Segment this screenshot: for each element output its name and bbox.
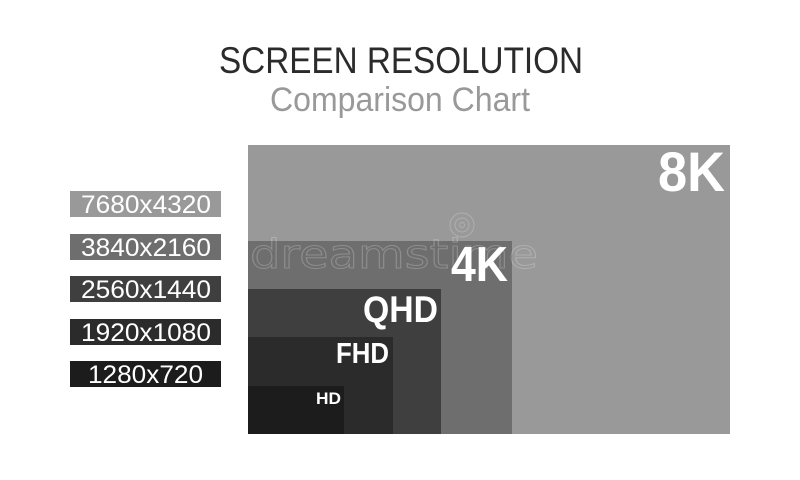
watermark: dreamstime	[250, 232, 538, 278]
title: SCREEN RESOLUTION	[219, 40, 583, 81]
label: HD: HD	[316, 389, 341, 408]
label: FHD: FHD	[336, 338, 389, 370]
label: 8K: 8K	[658, 140, 725, 203]
label: 4K: 4K	[451, 238, 508, 292]
panel: FHD	[248, 337, 393, 434]
subtitle: Comparison Chart	[270, 81, 531, 119]
nested resolution chart	[248, 140, 730, 434]
panel: 8K	[248, 145, 730, 434]
legend: 3840x2160: 3840x2160	[81, 234, 211, 262]
legend: 1280x720: 1280x720	[88, 361, 203, 389]
legend: 2560x1440: 2560x1440	[81, 276, 211, 304]
panel: QHD	[248, 289, 441, 434]
watermark	[250, 213, 538, 278]
legend: 7680x4320: 7680x4320	[81, 191, 211, 219]
panel: 4K	[248, 241, 512, 434]
legend: 1920x1080: 1920x1080	[81, 319, 211, 347]
label: QHD: QHD	[363, 289, 438, 330]
panel: HD	[248, 386, 344, 434]
resolution legend	[70, 191, 221, 389]
